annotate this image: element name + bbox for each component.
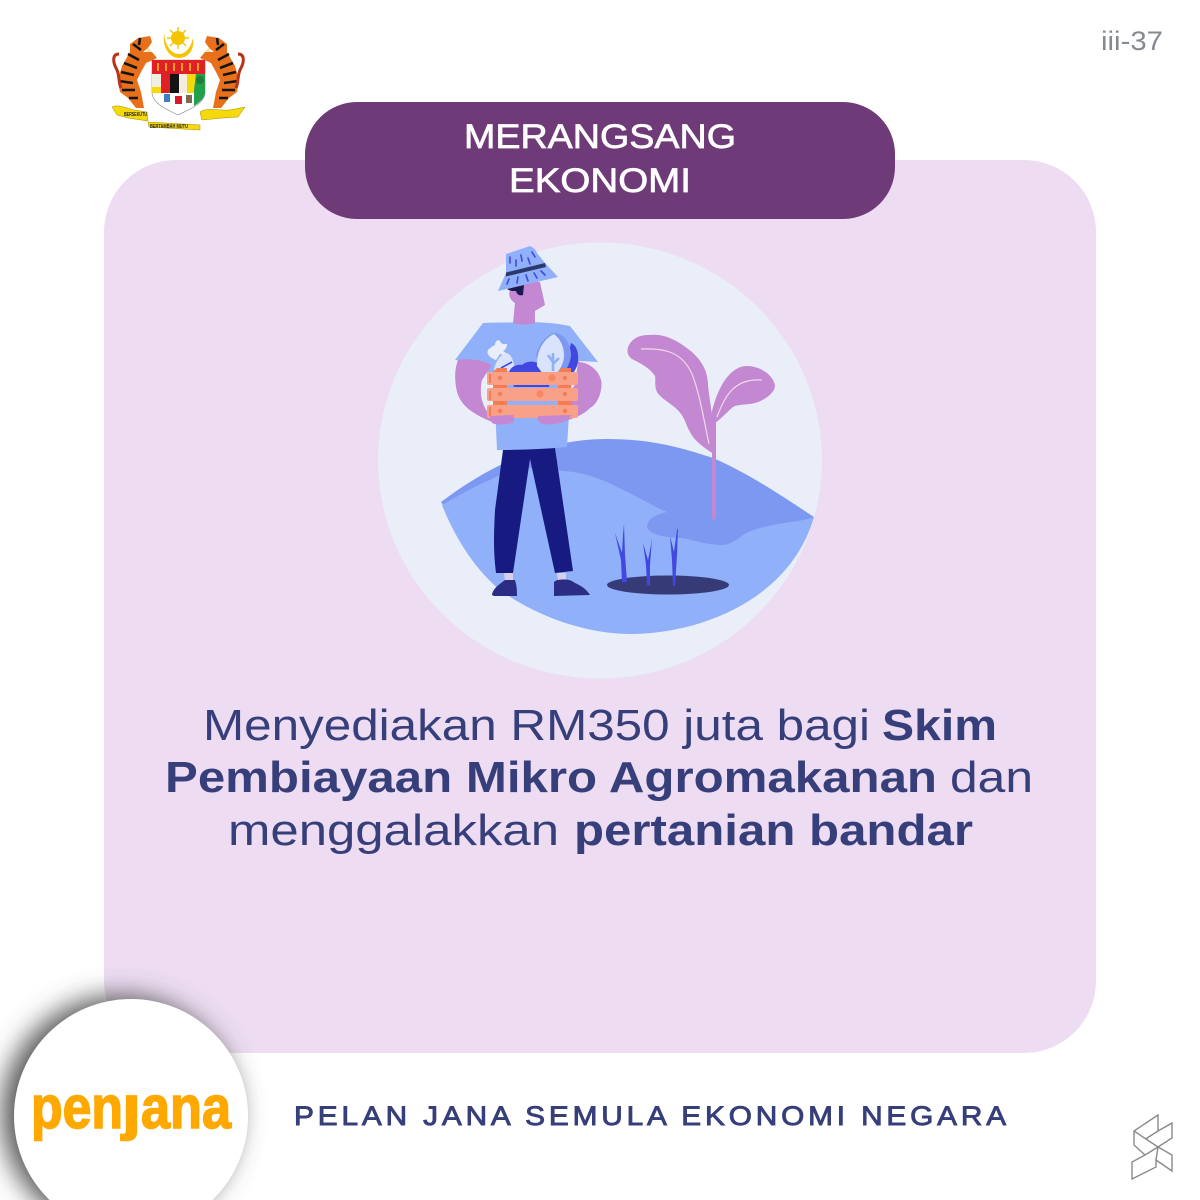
footer tagline: PELAN JANA SEMULA EKONOMI NEGARA (294, 1101, 1010, 1131)
crate (487, 368, 578, 418)
left tiger (114, 36, 157, 108)
body text: menggalakkan (228, 806, 559, 855)
front hill (442, 468, 814, 634)
body text: Pembiayaan Mikro Agromakanan (165, 753, 937, 802)
penjana logo badge (2, 996, 248, 1200)
background circle (378, 242, 822, 678)
left arm (455, 359, 497, 424)
icon: Malaysian coat of arms (112, 27, 245, 130)
shield (152, 60, 205, 115)
neck and head (509, 280, 545, 324)
motto ribbon: BERTAMBAH MUTU (150, 124, 188, 130)
penjana wordmark: pen (31, 1074, 123, 1141)
penjana wordmark: j (121, 1074, 141, 1141)
heading text: MERANGSANG (464, 118, 736, 156)
page number: iii-37 (1101, 26, 1163, 56)
body text: dan (950, 753, 1033, 802)
body text: Menyediakan RM350 juta bagi (203, 701, 870, 750)
sprouts (615, 524, 678, 586)
left arm gap (481, 378, 495, 416)
ankles (504, 573, 566, 582)
hair (507, 285, 524, 295)
illustration: farmer holding vegetable crate (378, 242, 822, 678)
panel: main lilac card (104, 160, 1096, 1053)
trousers (494, 448, 573, 573)
icon: publisher mark (1132, 1115, 1172, 1179)
right arm (555, 362, 602, 423)
heading text: EKONOMI (509, 162, 691, 200)
heading text (464, 118, 736, 200)
heading pill (305, 102, 895, 219)
back hill (441, 439, 814, 560)
t-shirt (455, 322, 598, 450)
hat (498, 246, 558, 291)
shoes (492, 579, 590, 596)
body text (165, 701, 1033, 855)
body text: pertanian bandar (574, 806, 973, 855)
hole (607, 576, 729, 594)
body text: Skim (882, 701, 997, 750)
penjana wordmark: ana (141, 1074, 232, 1141)
hands (490, 415, 572, 424)
crescent and sun (164, 27, 193, 58)
motto ribbon (112, 106, 245, 130)
right tiger (200, 36, 243, 108)
vegetables in crate (487, 333, 578, 387)
motto ribbon: BERSEKUTU (124, 112, 147, 118)
plant (627, 335, 775, 520)
penjana wordmark (34, 1094, 232, 1142)
